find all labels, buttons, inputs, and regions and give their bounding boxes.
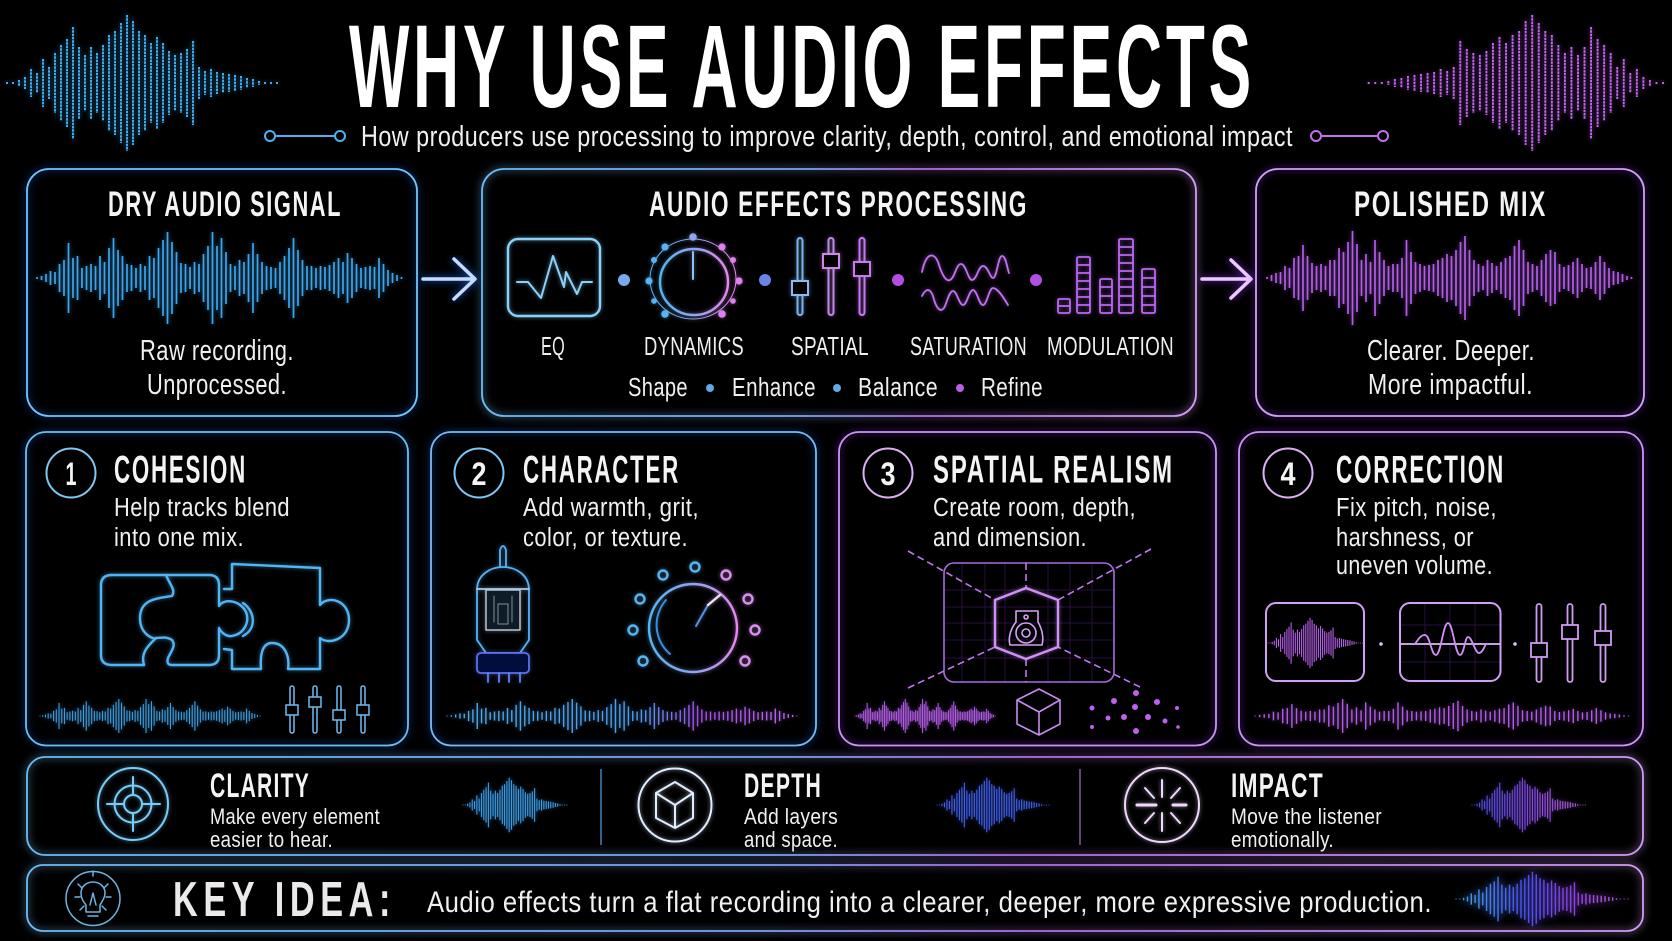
panel text <box>140 335 294 401</box>
impact text <box>1231 767 1382 852</box>
icon: impact burst <box>1125 768 1199 842</box>
depth text: DEPTH <box>744 767 822 805</box>
dot <box>618 274 630 286</box>
strip: clarity depth impact <box>27 757 1643 855</box>
waveform: polished <box>1267 231 1632 325</box>
icon: vacuum tube <box>477 546 529 682</box>
decorative waveform: top right purple <box>1369 15 1663 151</box>
effect labels: EQ <box>541 333 565 361</box>
clarity text <box>210 767 380 852</box>
card text <box>523 494 699 552</box>
card text: color, or texture. <box>523 524 688 552</box>
panel: dry audio signal <box>27 169 417 416</box>
arrow: processing to mix <box>1202 260 1251 298</box>
card heading: SPATIAL REALISM <box>933 448 1174 492</box>
card 1: cohesion <box>26 432 408 746</box>
card heading: CHARACTER <box>523 448 680 492</box>
card text: uneven volume. <box>1336 552 1493 580</box>
panel frame <box>482 169 1196 416</box>
connector: subtitle right <box>1311 131 1388 141</box>
waveform: cohesion <box>40 699 260 733</box>
card text: Create room, depth, <box>933 494 1136 522</box>
icon: dynamics knob <box>645 233 743 319</box>
icon: saturation waves <box>922 255 1009 310</box>
icon: light bulb <box>66 871 120 926</box>
panel text <box>1367 335 1535 401</box>
strip: key idea <box>27 865 1643 931</box>
number badge: 1 <box>66 456 76 492</box>
connector: subtitle left <box>265 131 345 141</box>
waveform: depth <box>937 778 1049 832</box>
card frame <box>431 432 816 746</box>
card heading: COHESION <box>114 448 247 492</box>
panel: audio effects processing <box>482 169 1196 416</box>
card text: Fix pitch, noise, <box>1336 494 1497 522</box>
process verbs: Enhance <box>732 374 816 402</box>
panel heading: POLISHED MIX <box>1354 185 1547 224</box>
number badge <box>864 448 912 498</box>
panel text: Unprocessed. <box>147 369 287 401</box>
effect labels: SATURATION <box>910 333 1027 361</box>
waveform: dry <box>37 232 402 324</box>
clarity text: easier to hear. <box>210 827 333 852</box>
number badge: 4 <box>1280 456 1296 492</box>
panel: polished mix <box>1256 169 1644 416</box>
waveform: key idea <box>1456 872 1628 926</box>
icon: cube <box>1017 689 1060 735</box>
number badge: 3 <box>880 456 896 492</box>
panel frame <box>1256 169 1644 416</box>
card text: harshness, or <box>1336 524 1474 552</box>
process verbs: Balance <box>858 374 938 402</box>
card 3: spatial realism <box>839 432 1216 746</box>
icon: scatter dots <box>1090 690 1180 734</box>
arrow: dry to processing <box>423 259 475 299</box>
clarity text: Make every element <box>210 804 380 829</box>
subtitle: How producers use processing to improve clarity, depth, control, and emotional impact <box>361 121 1293 153</box>
effect labels: SPATIAL <box>791 333 869 361</box>
number badge: 2 <box>472 456 486 492</box>
icon: depth cube <box>638 768 712 842</box>
panel frame <box>27 169 417 416</box>
card frame <box>839 432 1216 746</box>
strip frame <box>27 865 1643 931</box>
dot <box>892 274 904 286</box>
waveform: impact <box>1472 778 1585 832</box>
icon: drive knob <box>628 562 760 672</box>
dot <box>1030 274 1042 286</box>
panel text: Raw recording. <box>140 335 294 367</box>
panel heading: AUDIO EFFECTS PROCESSING <box>649 185 1028 224</box>
process verbs: Refine <box>981 374 1043 402</box>
process verbs <box>628 374 1043 402</box>
dot <box>1513 642 1517 646</box>
card text: Add warmth, grit, <box>523 494 699 522</box>
waveform: clarity <box>463 778 567 832</box>
card 2: character <box>431 432 816 746</box>
panel text: More impactful. <box>1368 369 1533 401</box>
strip frame <box>27 757 1643 855</box>
separator <box>600 769 602 845</box>
icon: room with speaker <box>908 549 1151 688</box>
impact text: Move the listener <box>1231 804 1382 829</box>
effect labels: DYNAMICS <box>644 333 744 361</box>
number badge <box>1264 448 1312 498</box>
number badge <box>454 448 504 498</box>
dot <box>759 274 771 286</box>
icon: scope box <box>1400 603 1500 681</box>
icon: waveform box <box>1266 603 1364 681</box>
key idea label: KEY IDEA: <box>173 873 396 927</box>
card heading: CORRECTION <box>1336 448 1505 492</box>
icon: spatial sliders <box>792 238 870 315</box>
impact text: emotionally. <box>1231 827 1334 852</box>
icon: clarity target <box>98 768 168 840</box>
impact text: IMPACT <box>1231 767 1324 805</box>
icon: mini faders <box>286 686 369 733</box>
panel text: Clearer. Deeper. <box>1367 335 1535 367</box>
card text <box>933 494 1136 552</box>
card frame <box>26 432 408 746</box>
depth text: Add layers <box>744 804 838 829</box>
waveform: correction <box>1255 699 1629 733</box>
card frame <box>1239 432 1643 746</box>
card text <box>114 494 290 552</box>
depth text <box>744 767 838 852</box>
icon: puzzle pieces <box>101 564 349 669</box>
waveform: character <box>447 699 797 733</box>
effect labels <box>541 333 1174 361</box>
card text: and dimension. <box>933 524 1087 552</box>
waveform: spatial <box>855 699 995 733</box>
depth text: and space. <box>744 827 838 852</box>
card text: into one mix. <box>114 524 244 552</box>
card text: Help tracks blend <box>114 494 290 522</box>
dot <box>1379 642 1383 646</box>
key idea sentence: Audio effects turn a flat recording into a clearer, deeper, more expressive production. <box>427 886 1432 919</box>
icon: EQ <box>508 239 600 316</box>
number badge <box>46 448 96 498</box>
icon: modulation bars <box>1058 239 1155 313</box>
card text <box>1336 494 1497 580</box>
separator <box>1079 769 1081 845</box>
panel heading: DRY AUDIO SIGNAL <box>108 185 342 224</box>
icon: correction faders <box>1531 604 1611 682</box>
clarity text: CLARITY <box>210 767 310 805</box>
effect labels: MODULATION <box>1047 333 1174 361</box>
decorative waveform: top left blue <box>7 15 277 151</box>
card 4: correction <box>1239 432 1643 746</box>
process verbs: Shape <box>628 374 688 402</box>
